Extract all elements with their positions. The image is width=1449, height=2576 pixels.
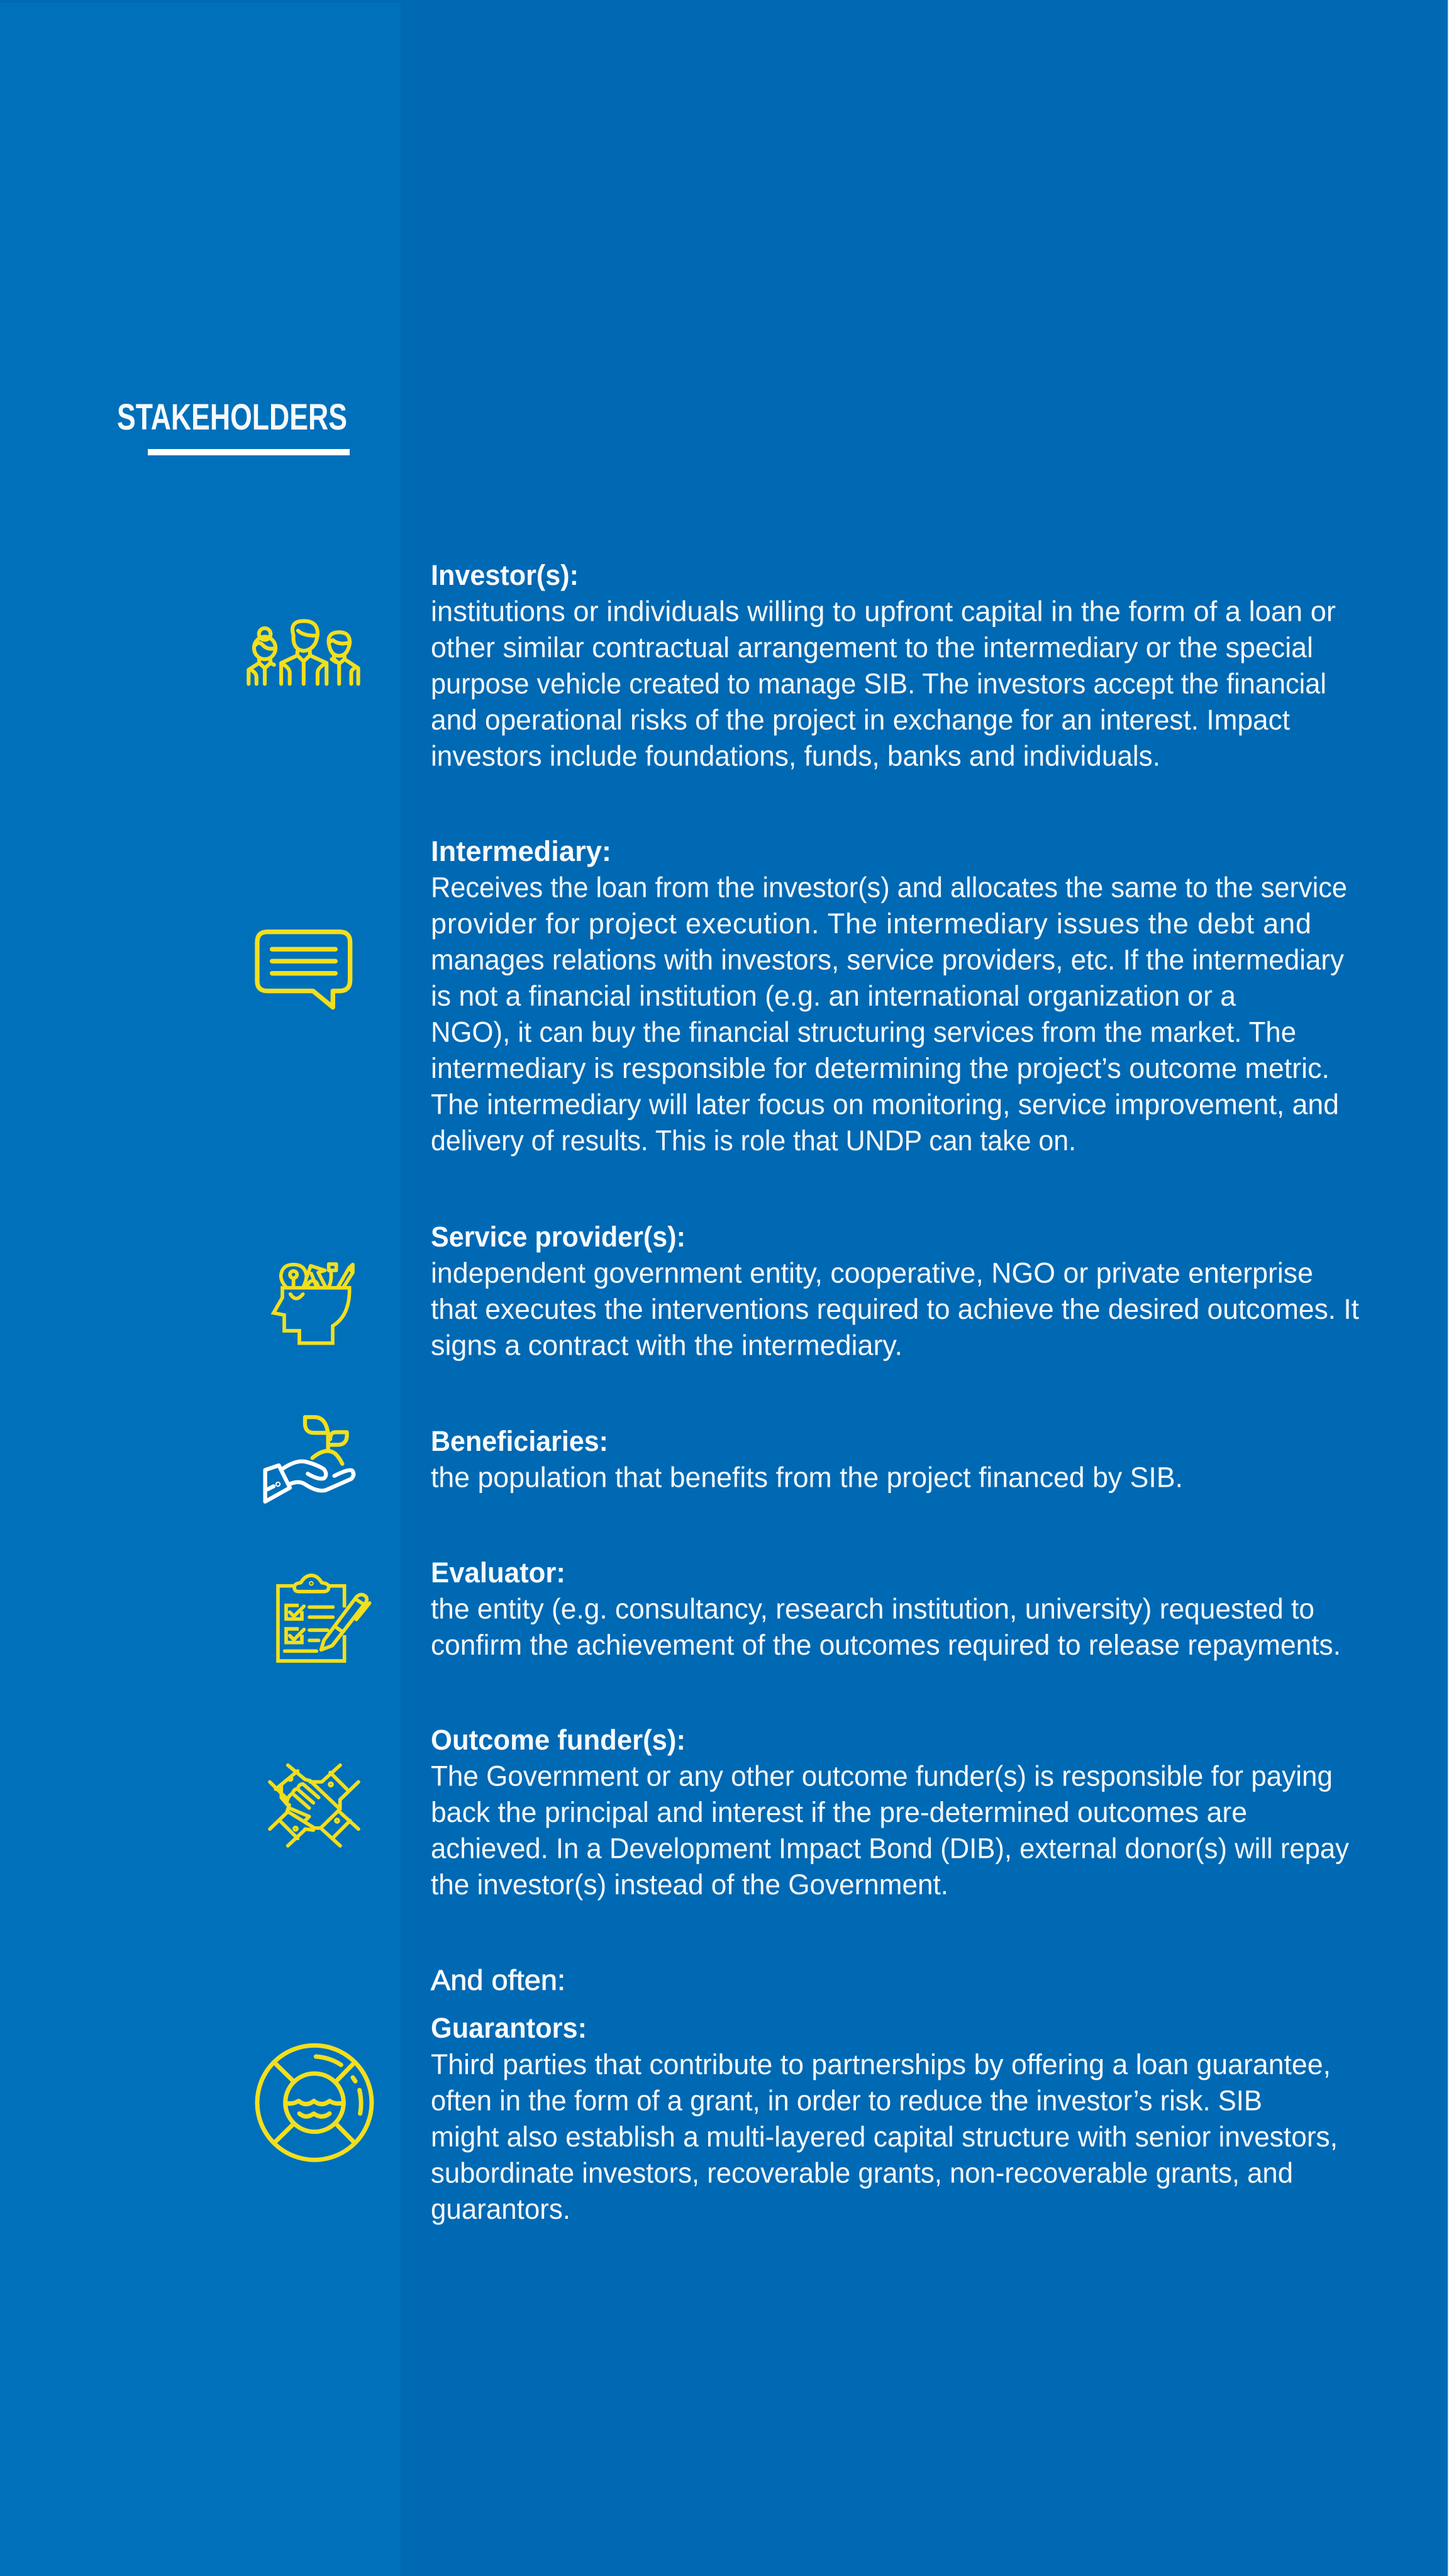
text block: evaluator: the entity (e.g. consultancy, research institution, university) requested to	[431, 1592, 1314, 1625]
icon: speech bubble	[257, 932, 350, 1008]
text block: outcome funders: Outcome funder(s):	[431, 1724, 686, 1756]
text block: guarantors: Third parties that contribute to partnerships by offering a loan guarantee,	[431, 2048, 1331, 2080]
text block: service providers	[431, 1221, 1359, 1361]
text block: investors: Investor(s):	[431, 559, 579, 591]
text: and often: And often:	[431, 1964, 565, 1996]
text block: service providers: independent government entity, cooperative, NGO or private enterprise	[431, 1257, 1313, 1289]
text block: evaluator: confirm the achievement of the outcomes required to release repayments.	[431, 1629, 1341, 1661]
text block: intermediary	[431, 835, 1347, 1157]
text block: investors: purpose vehicle created to manage SIB. The investors accept the financial	[431, 668, 1326, 699]
text block: outcome funders: back the principal and interest if the pre-determined outcomes are	[431, 1796, 1247, 1828]
text block: beneficiaries	[431, 1425, 1183, 1493]
heading: stakeholders	[117, 397, 350, 455]
icon: investors group	[248, 621, 358, 684]
text block: intermediary: The intermediary will later focus on monitoring, service improvement, and	[431, 1088, 1339, 1121]
text block: intermediary: manages relations with investors, service providers, etc. If the intermediary	[431, 943, 1344, 976]
text block: intermediary: Intermediary:	[431, 835, 611, 867]
text block: service providers: signs a contract with the intermediary.	[431, 1330, 902, 1361]
icon: hand holding seedling	[265, 1417, 353, 1502]
text block: guarantors: Guarantors:	[431, 2012, 587, 2044]
text block: outcome funders: achieved. In a Development Impact Bond (DIB), external donor(s) will repay	[431, 1833, 1349, 1864]
text block: intermediary: NGO), it can buy the financial structuring services from the market. The	[431, 1016, 1296, 1048]
text block: investors: institutions or individuals willing to upfront capital in the form of a loan or	[431, 595, 1336, 628]
icon: joined hands	[270, 1765, 358, 1846]
text block: intermediary: provider for project execution. The intermediary issues the debt and	[431, 908, 1311, 940]
text block: guarantors: often in the form of a grant, in order to reduce the investor’s risk. SIB	[431, 2084, 1262, 2117]
text block: investors: other similar contractual arrangement to the intermediary or the special	[431, 631, 1313, 663]
text block: outcome funders: The Government or any other outcome funder(s) is responsible for paying	[431, 1760, 1333, 1792]
text block: service providers: that executes the interventions required to achieve the desired outcomes. It	[431, 1293, 1359, 1325]
text block: guarantors: guarantors.	[431, 2193, 570, 2225]
text block: beneficiaries: Beneficiaries:	[431, 1425, 608, 1457]
text block: investors: and operational risks of the project in exchange for an interest. Impact	[431, 704, 1290, 736]
text block: intermediary: is not a financial institution (e.g. an international organization or a	[431, 980, 1236, 1012]
heading: stakeholders: STAKEHOLDERS	[117, 397, 347, 438]
text block: intermediary: delivery of results. This is role that UNDP can take on.	[431, 1124, 1076, 1157]
text block: evaluator	[431, 1557, 1341, 1661]
icon: clipboard checklist	[278, 1575, 370, 1661]
text block: intermediary: intermediary is responsible for determining the project’s outcome metric.	[431, 1052, 1330, 1084]
panel: left column	[0, 3, 401, 2576]
text block: evaluator: Evaluator:	[431, 1557, 565, 1589]
text block: service providers: Service provider(s):	[431, 1221, 686, 1253]
icon: lifebuoy	[257, 2045, 372, 2160]
text block: investors: investors include foundations, funds, banks and individuals.	[431, 740, 1160, 772]
text block: beneficiaries: the population that benefits from the project financed by SIB.	[431, 1462, 1183, 1493]
text block: guarantors	[431, 2012, 1338, 2225]
text block: outcome funders: the investor(s) instead of the Government.	[431, 1868, 948, 1901]
text block: intermediary: Receives the loan from the investor(s) and allocates the same to the service	[431, 872, 1347, 903]
text block: investors	[431, 559, 1336, 772]
icon: head with ideas	[274, 1264, 353, 1343]
text block: guarantors: might also establish a multi-layered capital structure with senior investors,	[431, 2121, 1338, 2153]
text block: outcome funders	[431, 1724, 1349, 1901]
text block: guarantors: subordinate investors, recoverable grants, non-recoverable grants, and	[431, 2157, 1293, 2189]
